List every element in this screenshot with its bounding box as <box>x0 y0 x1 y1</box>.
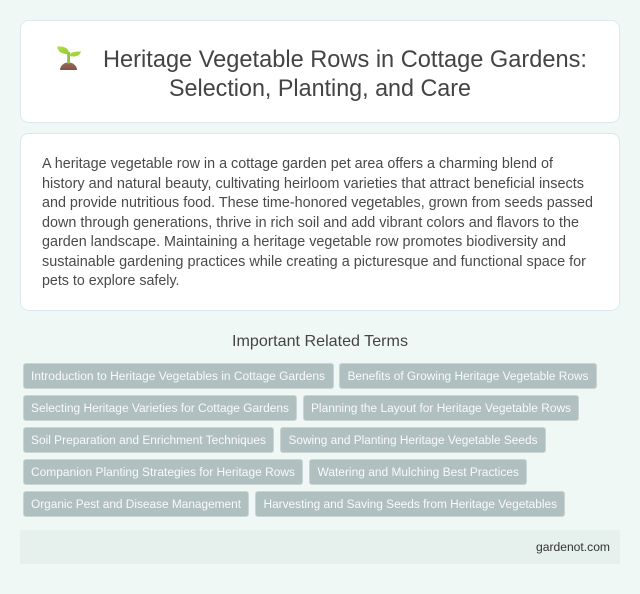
chip <box>340 364 596 388</box>
chip <box>24 460 302 484</box>
title: Heritage Vegetable Rows in Cottage Gardens: <box>103 46 587 73</box>
chip <box>24 364 334 388</box>
description text: garden landscape. Maintaining a heritage vegetable row promotes biodiversity and <box>42 234 566 250</box>
chip: Sowing and Planting Heritage Vegetable Seeds <box>288 433 538 447</box>
chip group: related terms <box>24 364 596 516</box>
chip <box>24 396 296 420</box>
chip <box>24 428 274 452</box>
chip: Companion Planting Strategies for Heritage Rows <box>31 465 295 479</box>
chip: Harvesting and Saving Seeds from Heritage Vegetables <box>264 497 557 511</box>
description text: history and natural beauty, cultivating heirloom varieties that attract beneficial insects <box>42 176 584 192</box>
description text: sustainable gardening practices while creating a picturesque and functional space for <box>42 254 586 270</box>
icon: seedling <box>57 46 81 70</box>
description text: A heritage vegetable row in a cottage garden pet area offers a charming blend of <box>42 156 554 172</box>
description text: down through generations, thrive in rich soil and add vibrant colors and flavors to the <box>42 215 579 231</box>
chip <box>304 396 578 420</box>
chip <box>280 428 546 452</box>
chip <box>24 492 248 516</box>
footer bar <box>20 530 620 564</box>
description text: pets to explore safely. <box>42 273 180 289</box>
chip: Planning the Layout for Heritage Vegetable Rows <box>311 401 571 415</box>
chip: Organic Pest and Disease Management <box>31 497 242 511</box>
title <box>103 46 587 102</box>
panel: description card <box>20 134 620 310</box>
heading: related terms: Important Related Terms <box>232 333 408 350</box>
title: Selection, Planting, and Care <box>169 75 471 102</box>
description text: and provide nutritious food. These time-honored vegetables, grown from seeds passed <box>42 195 593 211</box>
description text <box>42 156 593 289</box>
chip: Selecting Heritage Varieties for Cottage Gardens <box>31 401 289 415</box>
panel: title card <box>20 20 620 122</box>
chip <box>310 460 526 484</box>
chip: Watering and Mulching Best Practices <box>318 465 519 479</box>
chip: Soil Preparation and Enrichment Techniques <box>31 433 266 447</box>
chip: Benefits of Growing Heritage Vegetable Rows <box>348 369 588 383</box>
footer text: gardenot.com <box>536 540 610 554</box>
chip <box>256 492 564 516</box>
chip: Introduction to Heritage Vegetables in Cottage Gardens <box>31 369 325 383</box>
